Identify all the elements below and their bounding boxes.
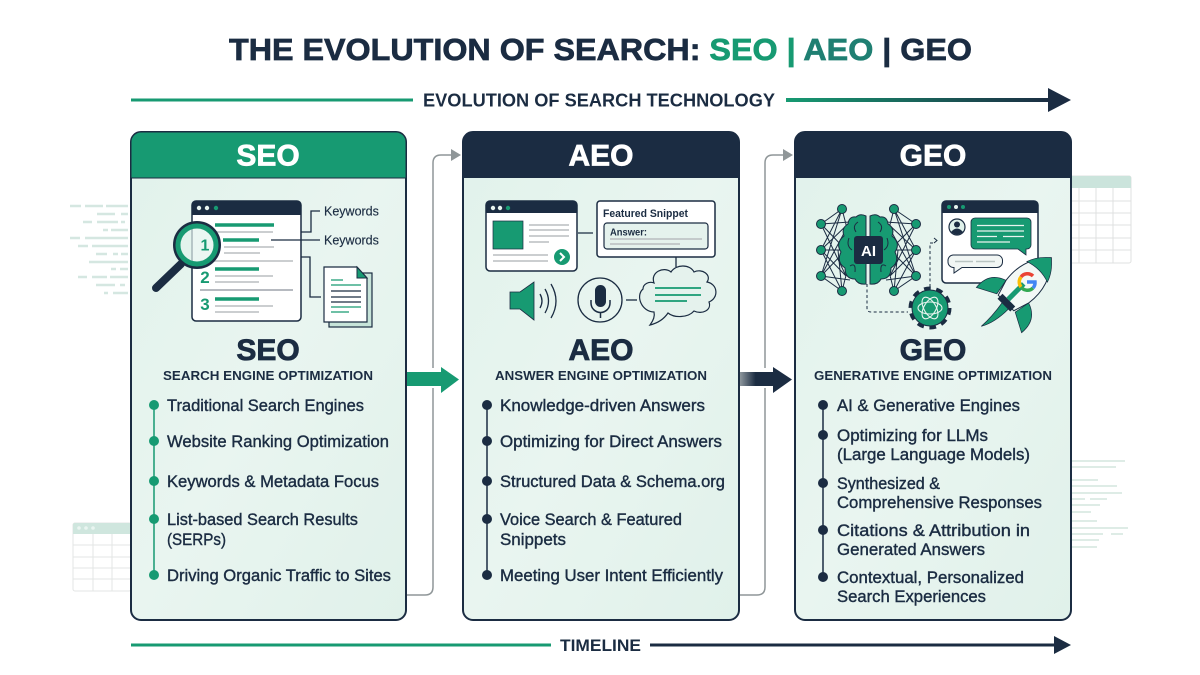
connector: AEO to GEO [739, 149, 793, 595]
title: THE EVOLUTION OF SEARCH: SEO | AEO | GEO [229, 32, 972, 67]
GEO name: GEO [900, 334, 966, 367]
icon: search results window with magnifier [156, 201, 301, 321]
SEO subtitle: SEARCH ENGINE OPTIMIZATION [163, 369, 373, 383]
icon: gear with knot [911, 289, 949, 327]
SEO header: SEO [236, 140, 300, 172]
AEO subtitle: ANSWER ENGINE OPTIMIZATION [495, 369, 707, 383]
SEO list: Website Ranking Optimization [167, 432, 389, 451]
GEO subtitle: GENERATIVE ENGINE OPTIMIZATION [814, 369, 1052, 383]
GEO list: Contextual, Personalized [837, 568, 1024, 587]
icon: chat window [942, 201, 1038, 283]
dashed connectors [867, 238, 937, 312]
icon: AI brain network [816, 204, 920, 296]
GEO list: Synthesized & [837, 474, 941, 493]
icon: speech cloud [640, 266, 716, 325]
panel: SEO [131, 132, 406, 620]
connector: SEO to AEO [406, 149, 461, 595]
SEO list: Traditional Search Engines [167, 396, 364, 415]
GEO list: (Large Language Models) [837, 445, 1030, 464]
GEO list: Citations & Attribution in [837, 521, 1030, 540]
panel: AEO [463, 132, 739, 620]
SEO list: (SERPs) [167, 530, 226, 549]
GEO list [818, 396, 1042, 606]
icon: rocket with G logo [959, 235, 1074, 350]
background: faint code lines right [1072, 461, 1128, 547]
keywords callouts: Keywords [324, 204, 379, 218]
top arrow: evolution of search technology [131, 88, 1071, 112]
AEO list: Structured Data & Schema.org [500, 472, 725, 491]
GEO list: Optimizing for LLMs [837, 426, 988, 445]
icon: microphone [578, 278, 637, 322]
AEO list: Knowledge-driven Answers [500, 396, 705, 415]
SEO header [131, 132, 406, 178]
top arrow: evolution of search technology: EVOLUTION OF SEARCH TECHNOLOGY [423, 90, 775, 110]
AEO list [482, 396, 725, 585]
AEO list: Optimizing for Direct Answers [500, 432, 722, 451]
AEO header [463, 132, 739, 178]
panel: GEO [795, 132, 1074, 620]
SEO list: Keywords & Metadata Focus [167, 472, 379, 491]
icon: featured snippet box: Featured Snippet [603, 208, 688, 220]
icon: document stack [324, 267, 372, 327]
AEO list: Meeting User Intent Efficiently [500, 566, 723, 585]
icon: search results window with magnifier: 2 [200, 268, 210, 287]
background: faint code lines left [70, 206, 128, 293]
GEO list: Comprehensive Responses [837, 493, 1042, 512]
SEO name: SEO [236, 334, 300, 367]
icon: search results window with magnifier: 3 [200, 295, 210, 314]
SEO list: List-based Search Results [167, 510, 358, 529]
icon: web page window [486, 201, 577, 271]
GEO list: Generated Answers [837, 540, 985, 559]
SEO list [149, 396, 391, 585]
timeline arrow [131, 636, 1071, 655]
icon: G logo [1019, 274, 1035, 290]
icon: speaker [510, 282, 556, 320]
keywords callouts [271, 204, 379, 297]
arrow: AEO to GEO [740, 367, 792, 393]
icon: AI brain network: AI [861, 243, 876, 260]
AEO list: Voice Search & Featured [500, 510, 682, 529]
background: faint table right [1070, 176, 1131, 263]
GEO list: AI & Generative Engines [837, 396, 1020, 415]
icon: featured snippet box [578, 201, 715, 267]
GEO header: GEO [900, 140, 966, 172]
arrow: SEO to AEO [407, 367, 459, 393]
GEO header [795, 132, 1071, 178]
SEO list: Driving Organic Traffic to Sites [167, 566, 391, 585]
GEO list: Search Experiences [837, 587, 986, 606]
timeline arrow: TIMELINE [560, 636, 641, 655]
AEO header: AEO [568, 140, 634, 172]
keywords callouts: Keywords [324, 234, 379, 248]
background: faint table left [73, 523, 131, 591]
icon: search results window with magnifier: 1 [201, 238, 210, 254]
AEO list: Snippets [500, 530, 566, 549]
AEO name: AEO [568, 334, 634, 367]
icon: featured snippet box: Answer: [610, 228, 647, 238]
